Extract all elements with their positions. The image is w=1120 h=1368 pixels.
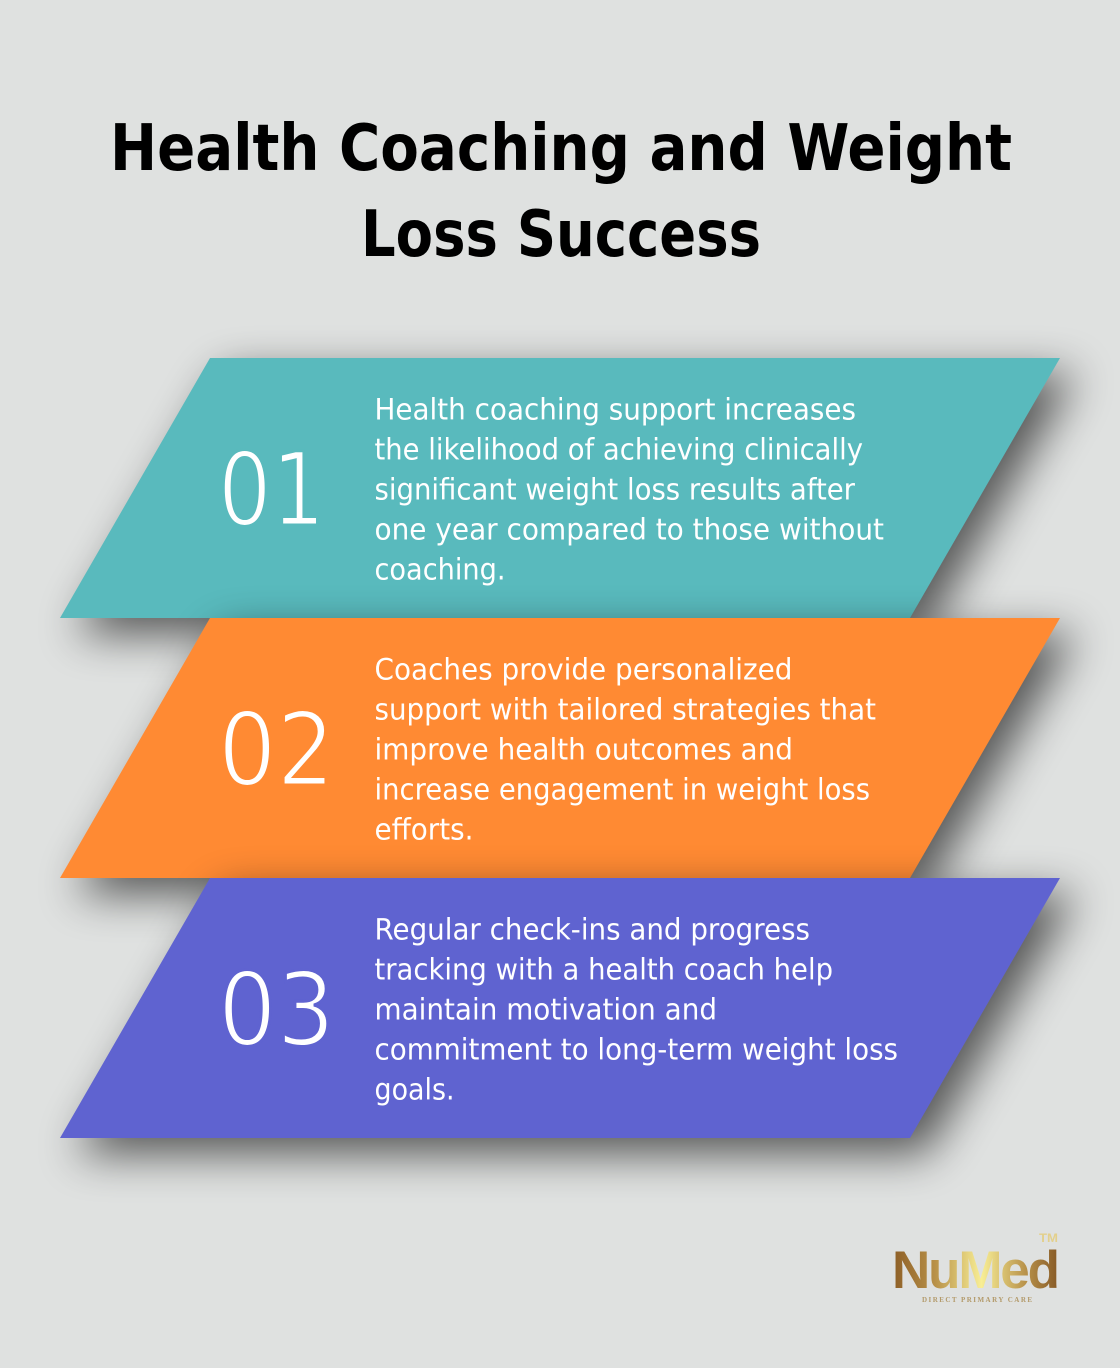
teal parallelogram [60, 358, 1060, 618]
number 02: 02 [218, 691, 335, 810]
text: step 02: efforts. [374, 812, 474, 846]
text: step 02 [374, 652, 876, 846]
logo: NuMed: DIRECT PRIMARY CARE [922, 1296, 1032, 1304]
title: Health Coaching and Weight [110, 112, 1012, 186]
text: step 02: support with tailored strategies that [374, 692, 876, 726]
title: Loss Success [361, 198, 761, 272]
panel: step 03 [60, 878, 1060, 1138]
orange parallelogram [60, 618, 1060, 878]
text: step 03: tracking with a health coach help [374, 952, 833, 986]
text: step 01 [374, 392, 884, 586]
logo: NuMed: TM [1039, 1231, 1058, 1245]
text: step 01: coaching. [374, 552, 506, 586]
panel: step 02 [60, 618, 1060, 878]
text: step 03: maintain motivation and [374, 992, 717, 1026]
text: step 01: Health coaching support increases [374, 392, 856, 426]
text: step 02: improve health outcomes and [374, 732, 793, 766]
text: step 03: goals. [374, 1072, 454, 1106]
text: step 01: the likelihood of achieving clinically [374, 432, 863, 466]
text: step 03 [374, 912, 898, 1106]
text: step 03: commitment to long-term weight loss [374, 1032, 898, 1066]
purple parallelogram [60, 878, 1060, 1138]
text: step 01: one year compared to those without [374, 512, 884, 546]
text: step 01: significant weight loss results after [374, 472, 856, 506]
panel: step 01 [60, 358, 1060, 618]
text: step 03: Regular check-ins and progress [374, 912, 810, 946]
text: step 02: Coaches provide personalized [374, 652, 792, 686]
text: step 02: increase engagement in weight loss [374, 772, 870, 806]
logo: NuMed: NuMed [892, 1241, 1060, 1300]
number 03: 03 [218, 951, 335, 1070]
title [110, 112, 1012, 272]
number 01: 01 [218, 431, 325, 550]
